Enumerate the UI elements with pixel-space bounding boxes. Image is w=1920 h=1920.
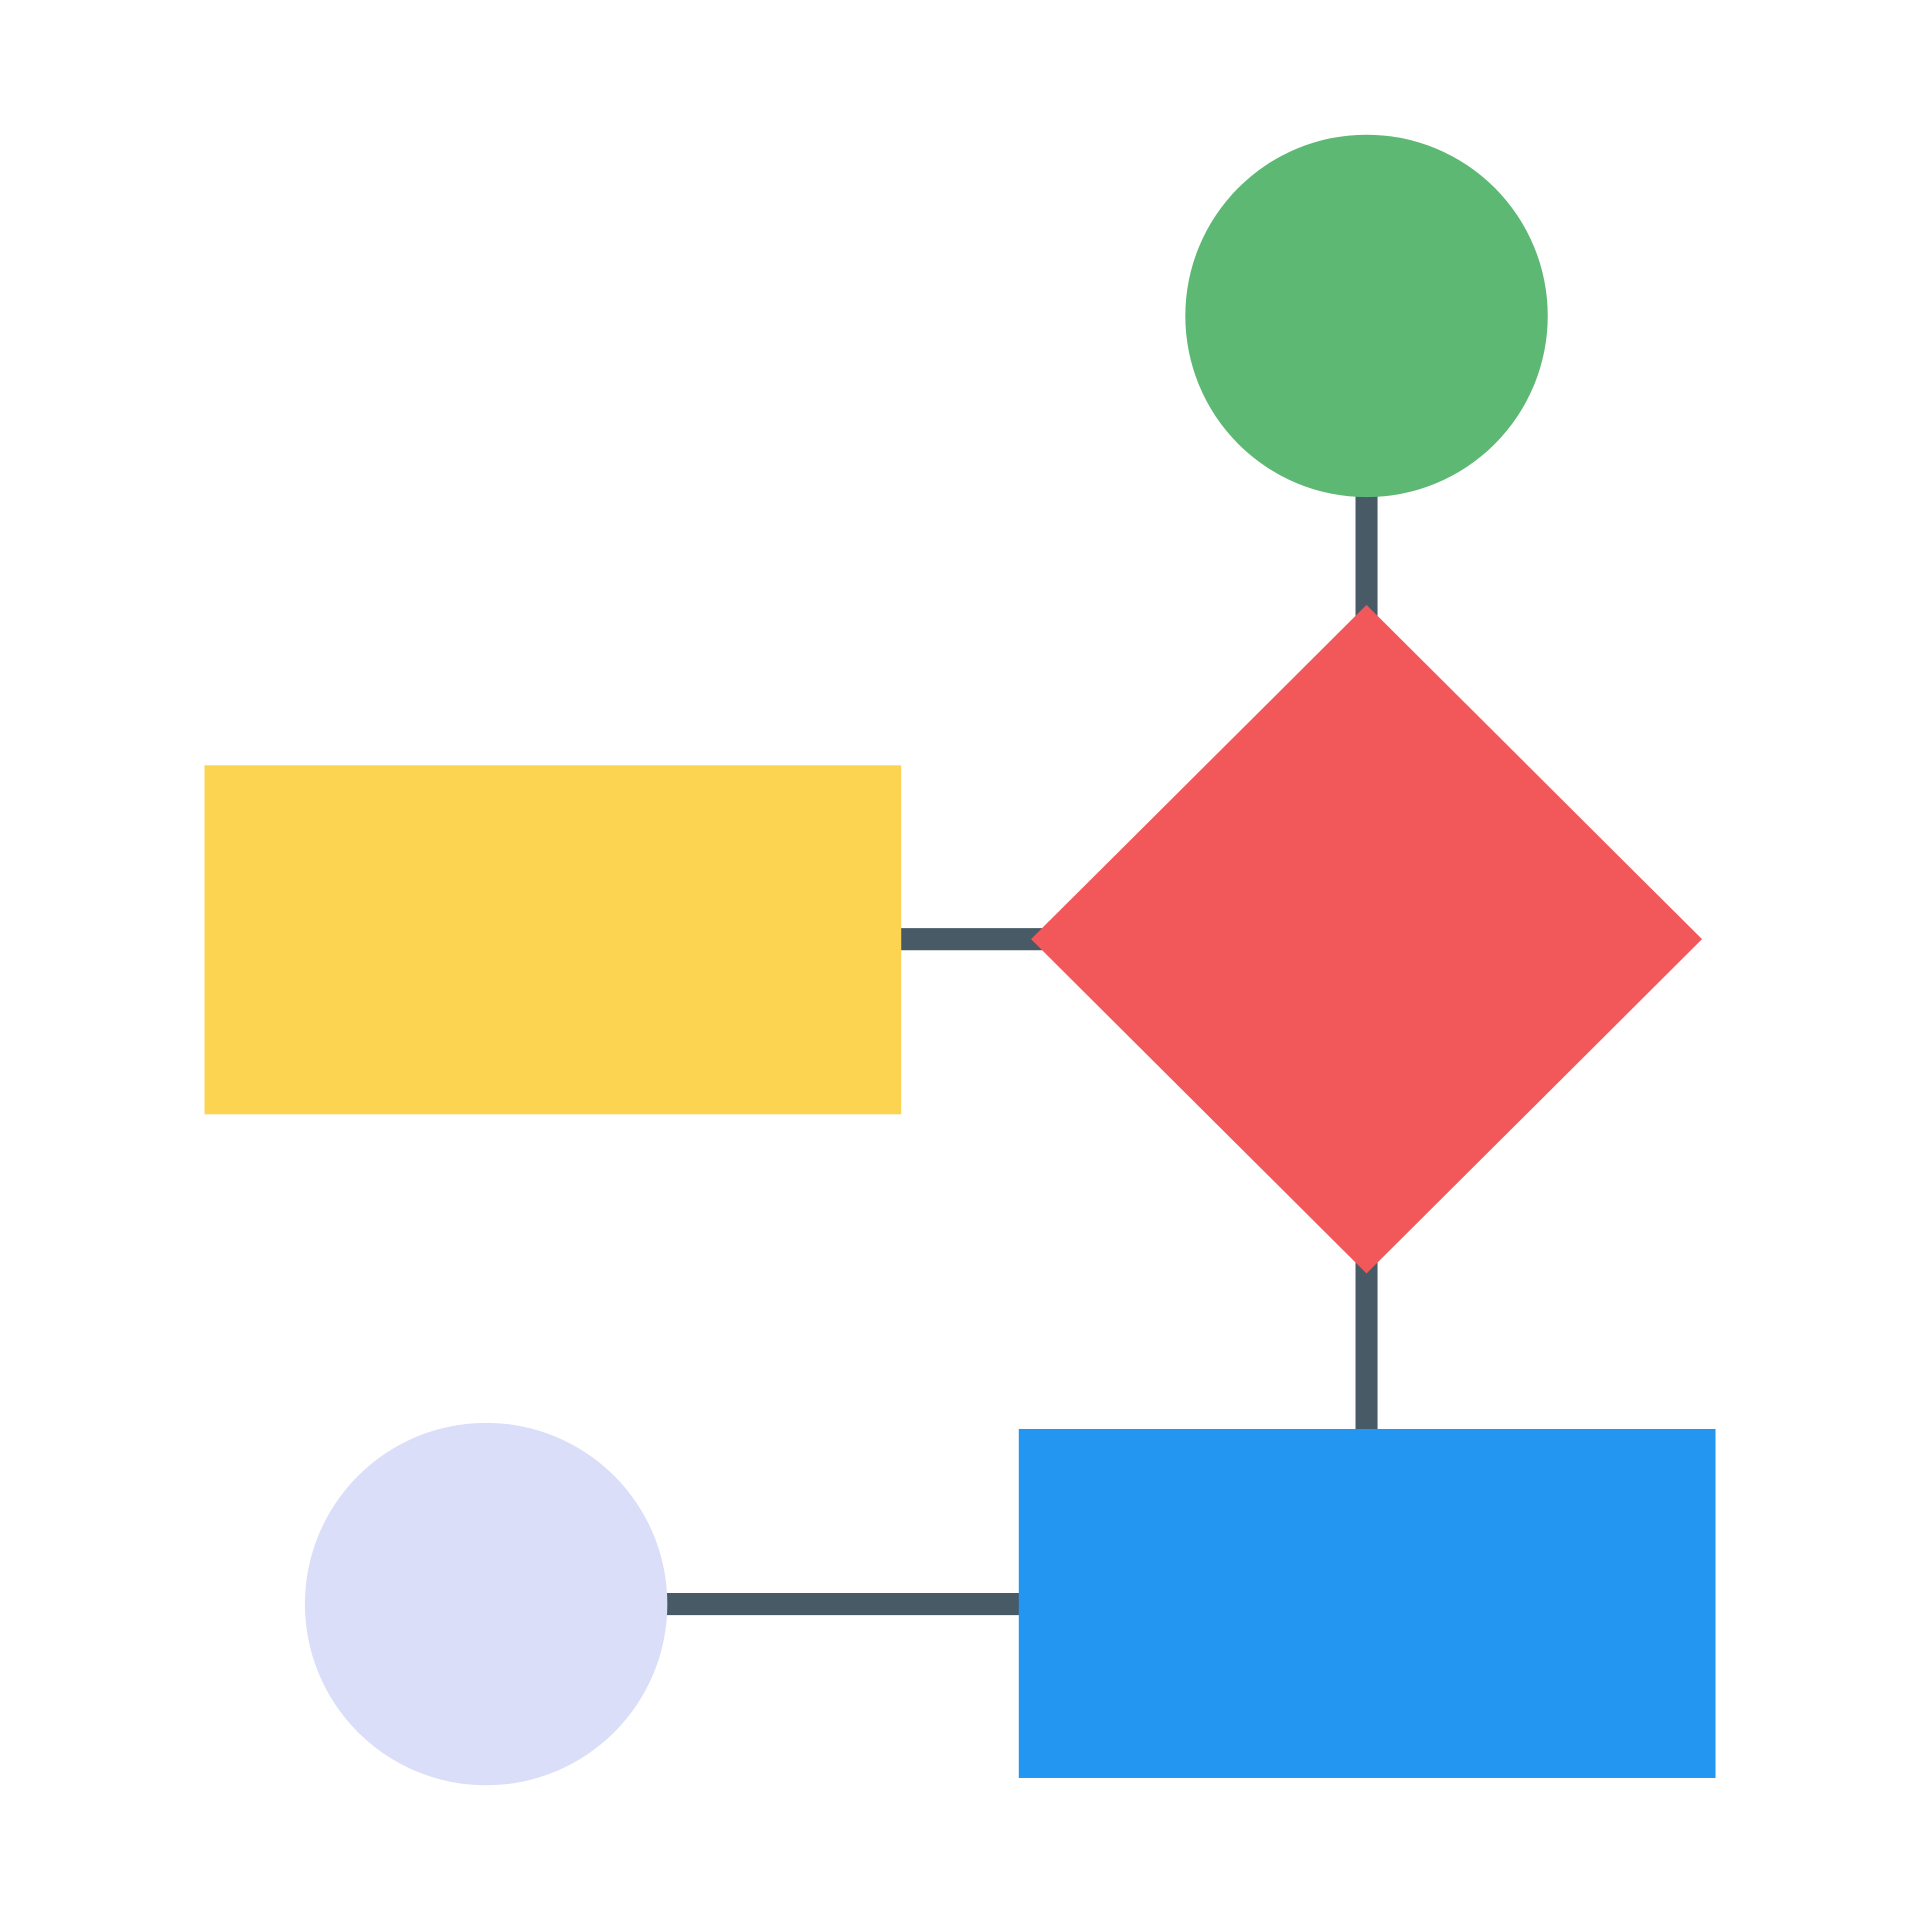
start node: green circle [1185, 135, 1548, 497]
process node: yellow rectangle [204, 765, 901, 1114]
decision node: red diamond [1031, 605, 1702, 1273]
process node: blue rectangle [1019, 1429, 1716, 1778]
connector lines [661, 490, 1367, 1604]
end node: lavender circle [305, 1423, 667, 1785]
